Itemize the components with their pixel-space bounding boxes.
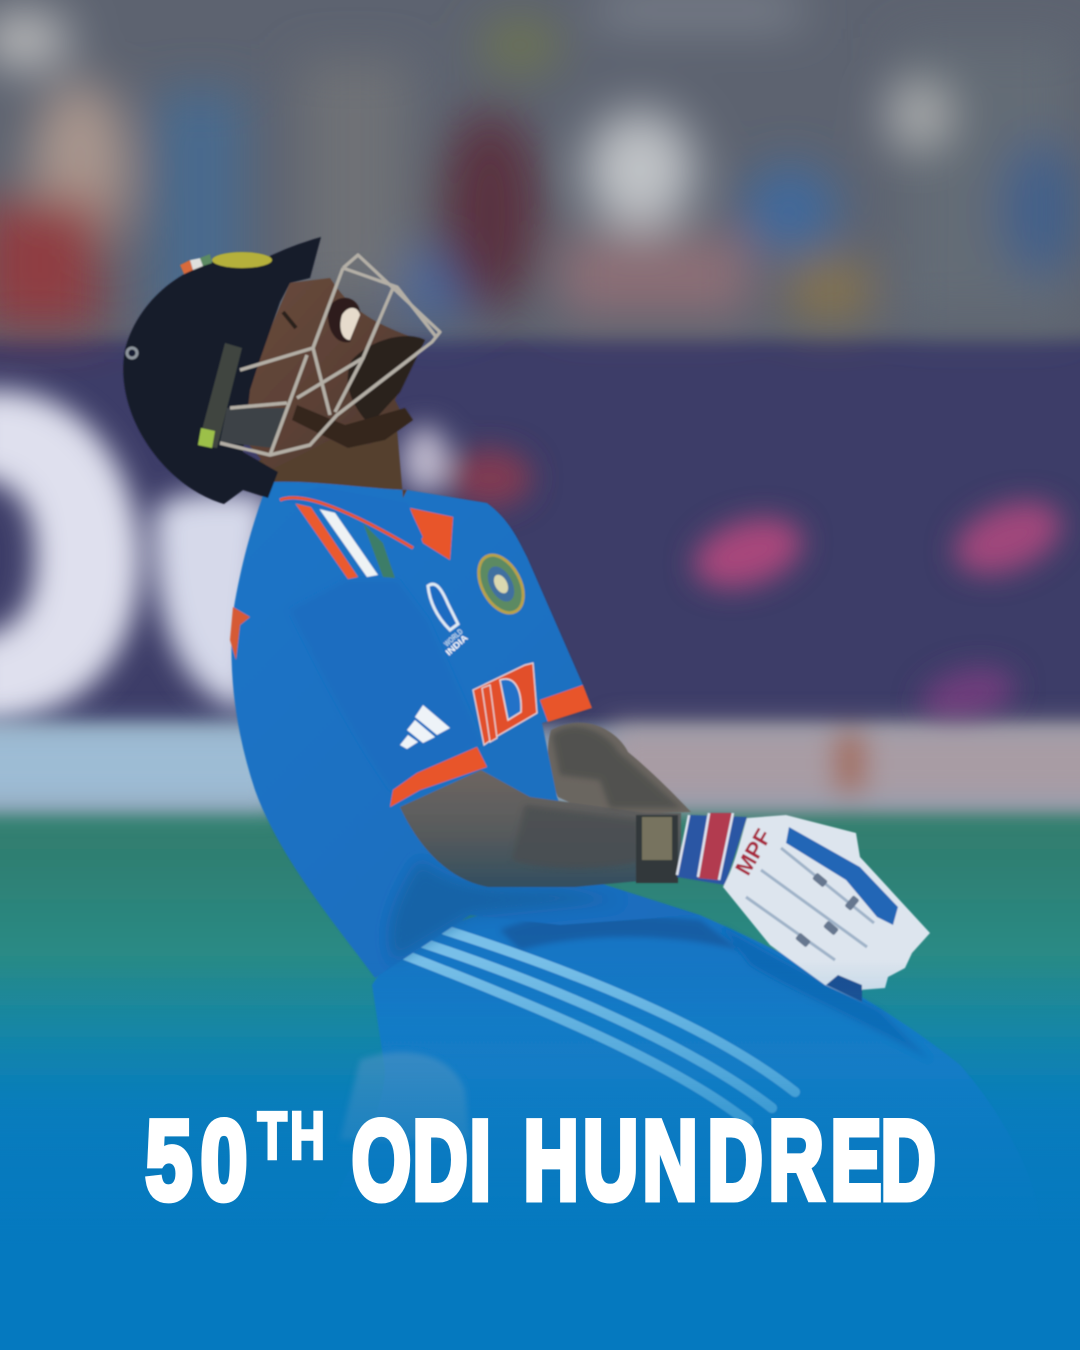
INDIA chest lettering [473, 663, 537, 745]
World Cup logo: INDIA [444, 632, 470, 657]
face [243, 278, 420, 470]
title: 50th ODI hundred: HUNDRED [524, 1098, 936, 1224]
faceguard grille [220, 255, 440, 455]
sleeve orange trim [390, 747, 487, 807]
beard [348, 336, 425, 425]
World Cup logo: WORLD [442, 627, 465, 648]
jersey torso [231, 482, 700, 978]
eye fold [283, 312, 296, 328]
title: 50th ODI hundred [146, 1097, 936, 1224]
watch strap [636, 815, 678, 883]
batting gloves [723, 815, 930, 1002]
helmet crest [212, 252, 272, 268]
BCCI badge [470, 548, 532, 620]
boundary board strip [0, 725, 1080, 805]
far sleeve orange trim [540, 685, 592, 722]
open mouth [328, 298, 360, 342]
far forearm [548, 723, 691, 815]
neck [245, 430, 407, 498]
glove brand: MPF [730, 824, 777, 880]
trousers [320, 905, 1040, 1230]
chin strap [292, 405, 413, 448]
helmet vent [127, 348, 137, 358]
World Cup logo [428, 584, 470, 657]
helmet side clamp [198, 343, 242, 448]
wristband [677, 813, 747, 885]
side orange mark [230, 607, 250, 660]
title: 50th ODI hundred: ODI [352, 1098, 491, 1224]
blurred advertising banner [0, 390, 1072, 733]
collar stripes [295, 503, 395, 579]
helmet flag [180, 254, 212, 274]
solid blue footer band [0, 1244, 1080, 1350]
title: 50th ODI hundred: TH [257, 1099, 325, 1173]
far arm tattoo [552, 727, 682, 808]
bottom blue gradient overlay [0, 960, 1080, 1245]
near forearm [400, 770, 681, 887]
arm tattoo [512, 805, 642, 868]
jersey lower shadow [390, 860, 620, 960]
shoulder stripes logo [400, 705, 450, 749]
under collar [410, 508, 453, 560]
title: 50th ODI hundred: 50 [146, 1097, 247, 1223]
helmet shell [123, 237, 321, 504]
collar band [280, 487, 423, 550]
jersey sleeve panel [290, 580, 481, 790]
cricketer [123, 237, 1040, 1230]
ear pad [220, 408, 287, 448]
blurred crowd background [0, 0, 1080, 330]
